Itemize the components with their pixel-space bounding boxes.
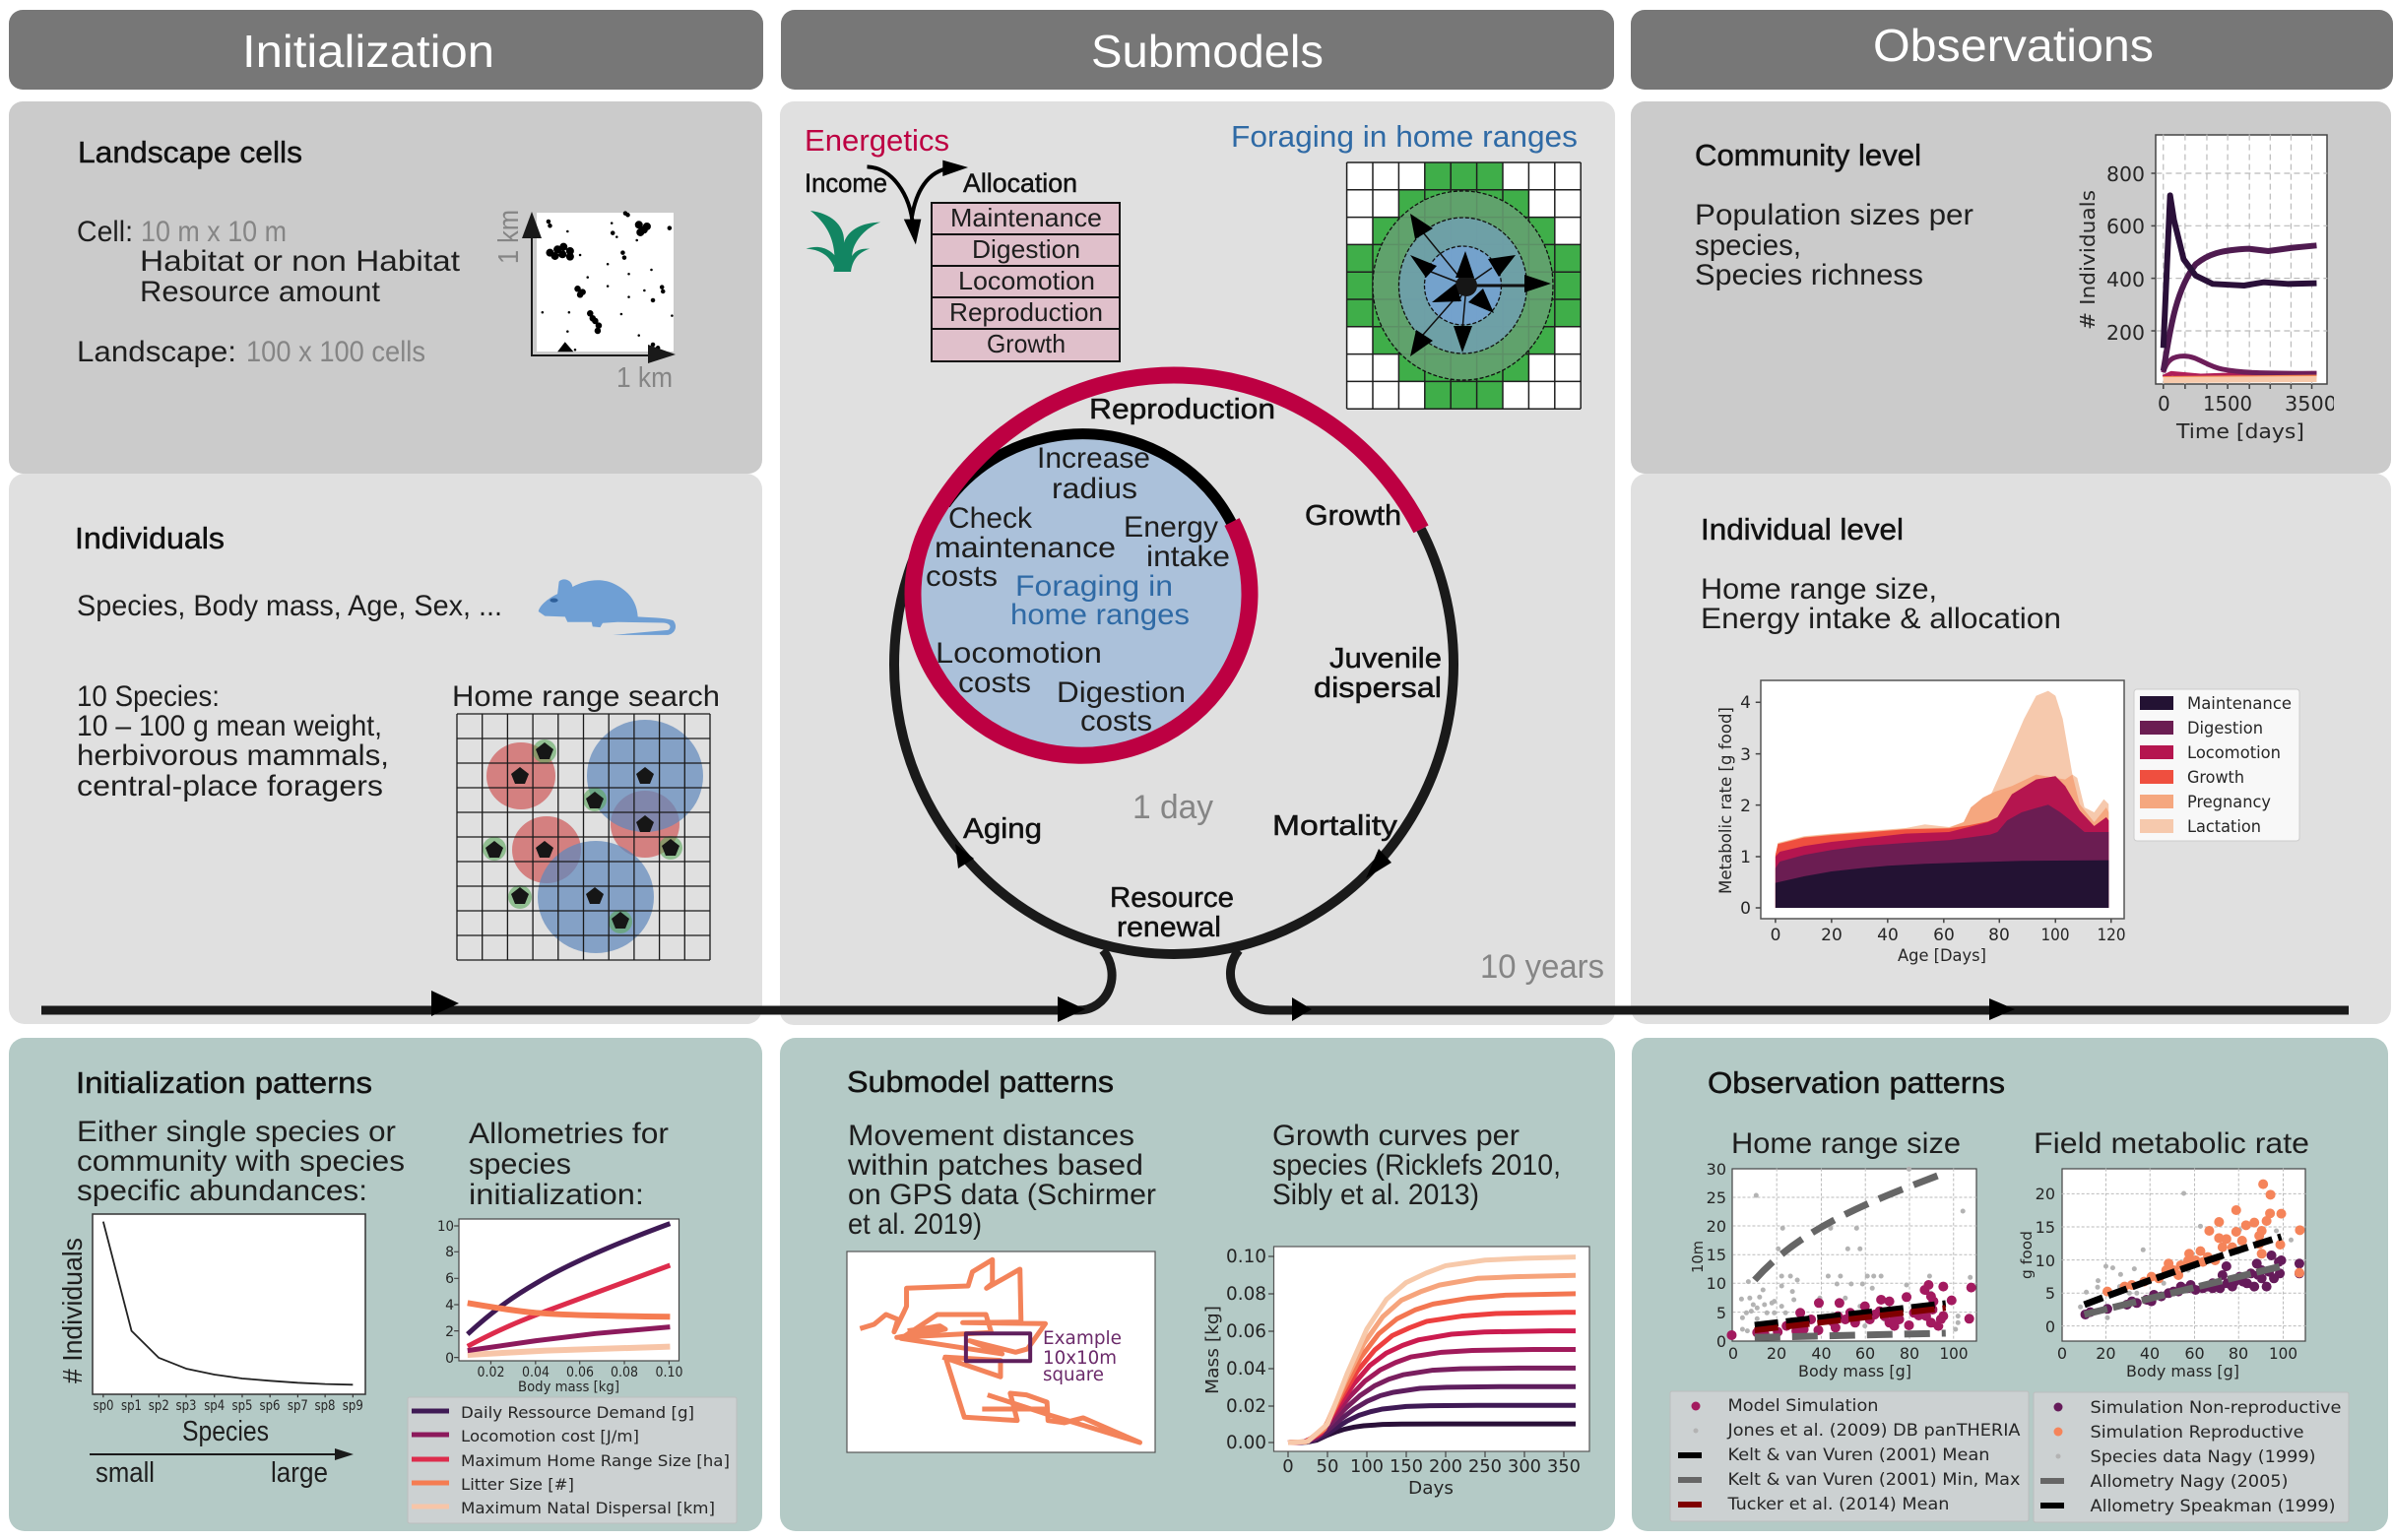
chart: allometries: 0 [445, 1351, 454, 1367]
chart: population over time: 400 [2106, 268, 2145, 291]
table: energy allocation: Growth [987, 329, 1066, 358]
chart: population over time: # Individuals [2076, 190, 2100, 330]
panel: observation patterns [1632, 1038, 2388, 1531]
text: community description [1695, 199, 1973, 291]
chart: field metabolic rate scatter: 0 [2045, 1317, 2055, 1336]
arrowhead: aging [955, 844, 974, 868]
text: cell description [77, 216, 461, 368]
heading: home range size: Home range size [1731, 1127, 1961, 1160]
chart: home range size scatter: 25 [1707, 1188, 1726, 1207]
chart: metabolic rate stacked area: Age [Days] [1898, 946, 1986, 966]
chart: field metabolic rate scatter: g food [2018, 1231, 2036, 1279]
chart: home range size scatter: 10 [1707, 1274, 1726, 1293]
diagram: foraging grid [1347, 162, 1581, 409]
legend: allometries [408, 1397, 737, 1523]
map: habitat landscape [537, 213, 674, 352]
heading: individuals: Individuals [75, 521, 225, 555]
text: allometries: Allometries for [469, 1118, 669, 1150]
chart: growth curves: 350 [1547, 1456, 1581, 1477]
chart: growth curves: Mass [kg] [1202, 1306, 1223, 1394]
legend: field metabolic rate: Species data Nagy (1999) [2090, 1447, 2316, 1467]
panel: individuals [9, 474, 762, 1024]
text: individual description: Energy intake & allocation [1701, 603, 2061, 635]
legend: allometries: Locomotion cost [J/m] [461, 1427, 639, 1445]
chart: metabolic rate stacked area: 1 [1740, 848, 1751, 867]
legend: allometries: Litter Size [#] [461, 1475, 574, 1494]
text: species description: 10 – 100 g mean weight, [77, 710, 382, 742]
text: abundances: Either single species or [77, 1116, 396, 1148]
label: 1 km horizontal: 1 km [616, 362, 673, 394]
panel: initialization patterns [9, 1038, 762, 1531]
text: community description: Population sizes per [1695, 199, 1973, 231]
legend: metabolic rate: Locomotion [2187, 743, 2281, 763]
chart: allometries [437, 1219, 683, 1395]
legend: field metabolic rate: Simulation Reproductive [2090, 1423, 2304, 1443]
chart: species abundance: sp8 [315, 1398, 335, 1414]
text: cell description: 100 x 100 cells [246, 336, 425, 368]
header: Observations [1631, 10, 2393, 90]
table: energy allocation: Maintenance [950, 203, 1102, 232]
chart: home range size scatter [1689, 1160, 1976, 1380]
label: income: Income [805, 168, 887, 198]
heading: community level: Community level [1695, 138, 1921, 172]
labels: daily foraging steps: Energy [1124, 511, 1218, 544]
chart: growth curves: 200 [1429, 1456, 1462, 1477]
label: species: Species [182, 1416, 269, 1447]
labels: daily foraging steps [926, 442, 1230, 738]
chart: species abundance: sp3 [175, 1398, 197, 1414]
chart: metabolic rate stacked area: Metabolic rate [g food] [1716, 707, 1736, 894]
text: cell description: Resource amount [140, 276, 381, 308]
icon: mouse [539, 579, 676, 635]
labels: daily foraging steps: maintenance [935, 532, 1116, 564]
labels: yearly steps: Mortality [1272, 810, 1398, 842]
labels: daily foraging steps: costs [1080, 705, 1152, 738]
labels: daily foraging steps: Foraging in [1015, 570, 1173, 603]
chart: metabolic rate stacked area [1716, 680, 2125, 966]
chart: allometries: Body mass [kg] [518, 1380, 619, 1395]
chart: metabolic rate stacked area: 0 [1740, 899, 1751, 919]
chart: growth curves: 150 [1390, 1456, 1423, 1477]
chart: growth curves: 250 [1468, 1456, 1502, 1477]
chart: metabolic rate stacked area: 3 [1740, 745, 1751, 765]
chart: species abundance: sp2 [149, 1398, 169, 1414]
heading: foraging in home ranges: Foraging in home ranges [1231, 119, 1578, 154]
text: movement distances [847, 1120, 1156, 1241]
chart: population over time: 3500 [2285, 392, 2337, 416]
text: allometries: initialization: [469, 1179, 644, 1211]
text: individual description: Home range size, [1701, 573, 1937, 606]
chart: species abundance: sp5 [232, 1398, 252, 1414]
chart: field metabolic rate scatter: 10 [2036, 1251, 2055, 1270]
legend: home range size: Kelt & van Vuren (2001) Min, Max [1727, 1470, 2021, 1490]
chart: GPS movement track [847, 1251, 1155, 1452]
legend: metabolic rate: Pregnancy [2187, 793, 2271, 812]
chart: metabolic rate stacked area: 4 [1740, 693, 1751, 713]
legend: metabolic rate: Lactation [2187, 817, 2261, 837]
labels: daily foraging steps: Check [948, 502, 1033, 535]
text: species description: 10 Species: [77, 680, 220, 713]
labels: daily foraging steps: home ranges [1010, 599, 1190, 631]
diagram: home range search grid [457, 714, 710, 960]
text: abundances [77, 1116, 405, 1207]
chart: metabolic rate stacked area: 80 [1988, 926, 2010, 945]
chart: field metabolic rate scatter: 60 [2184, 1344, 2205, 1363]
text: species description: herbivorous mammals, [77, 739, 389, 772]
table: energy allocation: Locomotion [958, 266, 1095, 295]
chart: metabolic rate stacked area: 60 [1933, 926, 1955, 945]
labels: yearly steps: dispersal [1314, 673, 1442, 704]
heading: landscape cells: Landscape cells [78, 135, 302, 169]
chart: home range size scatter: 40 [1811, 1344, 1832, 1363]
label: 1 day: 1 day [1132, 789, 1213, 826]
chart: population over time: 1500 [2203, 392, 2252, 416]
chart: home range size scatter: 80 [1900, 1344, 1919, 1363]
labels: daily foraging steps: costs [958, 667, 1031, 699]
label: allocation: Allocation [963, 168, 1077, 198]
chart: species abundance: sp6 [260, 1398, 281, 1414]
chart: field metabolic rate scatter: 20 [2036, 1185, 2055, 1203]
chart: field metabolic rate scatter: Body mass [g] [2126, 1362, 2239, 1380]
chart: population over time: 200 [2106, 321, 2145, 345]
header: Submodels: Submodels [1091, 26, 1324, 77]
header: Observations: Observations [1873, 20, 2154, 71]
label: large: large [271, 1457, 328, 1489]
arrowhead: mortality [1366, 849, 1391, 878]
chart: home range size scatter: 5 [1716, 1304, 1726, 1322]
arrow: main timeline right [1230, 950, 2349, 1021]
text: community description: species, [1695, 229, 1801, 262]
legend: home range size [1670, 1391, 2029, 1521]
legend: home range size: Jones et al. (2009) DB panTHERIA [1726, 1421, 2021, 1441]
chart: growth curves: Days [1408, 1478, 1454, 1499]
chart: metabolic rate stacked area: 100 [2040, 926, 2070, 945]
legend: home range size: Model Simulation [1727, 1396, 1879, 1416]
legend: metabolic rate: Growth [2187, 768, 2244, 788]
diagram: daily cycle inner disc [913, 434, 1250, 757]
labels: yearly steps [963, 394, 1442, 943]
chart: species abundance: sp7 [288, 1398, 308, 1414]
chart: metabolic rate stacked area: 120 [2098, 926, 2125, 945]
chart: metabolic rate stacked area: 2 [1740, 797, 1751, 816]
chart: species abundance: sp9 [343, 1398, 363, 1414]
heading: energetics: Energetics [805, 123, 949, 158]
chart: field metabolic rate scatter: 100 [2269, 1344, 2297, 1363]
text: community description: Species richness [1695, 259, 1923, 291]
chart: allometries: 0.10 [656, 1365, 683, 1380]
chart: home range size scatter: 30 [1707, 1160, 1726, 1179]
arrow: main timeline left [41, 950, 1112, 1022]
chart: species abundance: sp4 [204, 1398, 225, 1414]
labels: daily foraging steps: radius [1052, 473, 1137, 505]
labels: yearly steps: renewal [1117, 912, 1221, 943]
chart: growth curves: 0.08 [1226, 1283, 1266, 1305]
chart: home range size scatter: 100 [1940, 1344, 1968, 1363]
heading: home range search: Home range search [452, 680, 720, 713]
text: allometries: species [469, 1148, 571, 1181]
legend: field metabolic rate: Allometry Speakman (1999) [2090, 1497, 2336, 1516]
chart: growth curves: 0.06 [1226, 1320, 1266, 1342]
chart: allometries: 8 [445, 1245, 454, 1260]
arrows: income and allocation [868, 160, 968, 244]
text: allometries [469, 1118, 669, 1211]
chart: field metabolic rate scatter [2018, 1169, 2305, 1380]
legend: metabolic rate: Digestion [2187, 719, 2263, 738]
text: abundances: community with species [77, 1145, 405, 1178]
arrow: species size [90, 1448, 354, 1460]
chart: field metabolic rate scatter: 20 [2096, 1344, 2116, 1363]
panel: submodels [780, 101, 1615, 1025]
labels: daily foraging steps: intake [1146, 541, 1230, 573]
legend: allometries: Maximum Home Range Size [ha] [461, 1451, 730, 1470]
chart: home range size scatter: 60 [1855, 1344, 1875, 1363]
labels: yearly steps: Resource [1110, 882, 1234, 914]
chart: population over time: 0 [2158, 392, 2170, 416]
heading: field metabolic rate: Field metabolic rate [2034, 1127, 2309, 1160]
chart: field metabolic rate scatter: 0 [2057, 1344, 2067, 1363]
chart: home range size scatter: 0 [1716, 1332, 1726, 1351]
chart: growth curves: 50 [1317, 1456, 1338, 1477]
labels: daily foraging steps: costs [926, 560, 998, 593]
heading: initialization patterns: Initialization patterns [76, 1065, 372, 1100]
legend: allometries: Maximum Natal Dispersal [km] [461, 1499, 715, 1517]
chart: growth curves: 0.04 [1226, 1358, 1266, 1380]
chart: home range size scatter: Body mass [g] [1798, 1362, 1911, 1380]
chart: allometries: 2 [445, 1324, 454, 1340]
text: movement distances: on GPS data (Schirmer [848, 1179, 1156, 1211]
chart: growth curves: 0.10 [1226, 1246, 1266, 1267]
labels: yearly steps: Juvenile [1329, 643, 1442, 674]
chart: field metabolic rate scatter: 80 [2229, 1344, 2248, 1363]
chart: species abundance: # Individuals [57, 1238, 88, 1383]
chart: allometries: 0.04 [522, 1365, 550, 1380]
labels: yearly steps: Aging [963, 813, 1042, 845]
chart: field metabolic rate scatter: 5 [2045, 1284, 2055, 1303]
legend: metabolic rate [2134, 689, 2299, 841]
chart: GPS movement track: Example [1043, 1327, 1122, 1349]
labels: daily foraging steps: Digestion [1057, 676, 1186, 709]
chart: home range size scatter: 10m [1689, 1241, 1707, 1273]
chart: home range size scatter: 15 [1707, 1246, 1726, 1264]
text: species description: central-place foragers [77, 770, 383, 802]
diagram: yearly loop [894, 375, 1454, 954]
panel: landscape cells [9, 101, 762, 474]
table: energy allocation: Reproduction [949, 297, 1103, 327]
chart: population over time: 800 [2106, 162, 2145, 186]
legend: field metabolic rate [2034, 1392, 2349, 1522]
legend: allometries: Daily Ressource Demand [g] [461, 1403, 694, 1422]
chart: field metabolic rate scatter: 40 [2140, 1344, 2160, 1363]
label: 1 km vertical: 1 km [493, 210, 525, 264]
heading: observation patterns: Observation patterns [1708, 1065, 2005, 1100]
table: energy allocation: Digestion [972, 234, 1080, 264]
labels: daily foraging steps: Locomotion [936, 637, 1102, 670]
chart: growth curves: 0.00 [1226, 1432, 1266, 1453]
axes: map scale arrows [522, 212, 676, 363]
legend: home range size: Kelt & van Vuren (2001) Mean [1727, 1445, 1989, 1465]
panel: individual level [1631, 474, 2391, 1024]
header: Submodels [781, 10, 1614, 90]
labels: daily foraging steps: Increase [1037, 442, 1150, 475]
chart: species abundance: sp0 [93, 1398, 114, 1414]
arrows: foraging movement [1410, 214, 1551, 356]
chart: GPS movement track: 10x10m [1043, 1347, 1117, 1369]
text: cell description: Cell: [77, 216, 133, 248]
chart: metabolic rate stacked area: 20 [1821, 926, 1843, 945]
chart: metabolic rate stacked area: 0 [1771, 926, 1780, 945]
chart: home range size scatter: 20 [1707, 1217, 1726, 1236]
chart: metabolic rate stacked area: 40 [1877, 926, 1899, 945]
chart: species abundance [57, 1214, 365, 1414]
chart: GPS movement track: square [1043, 1364, 1104, 1385]
label: 10 years: 10 years [1480, 948, 1604, 986]
header: Initialization [9, 10, 763, 90]
chart: growth curves: 100 [1350, 1456, 1384, 1477]
chart: growth curves: 300 [1508, 1456, 1541, 1477]
text: cell description: 10 m x 10 m [141, 216, 287, 248]
label: small: small [96, 1457, 155, 1489]
text: attributes: Species, Body mass, Age, Sex, ... [77, 590, 502, 622]
chart: allometries: 0.06 [566, 1365, 594, 1380]
labels: yearly steps: Reproduction [1089, 394, 1275, 425]
panel: community level [1631, 101, 2391, 474]
labels: yearly steps: Growth [1305, 500, 1401, 532]
chart: allometries: 10 [437, 1219, 454, 1235]
text: growth curves: species (Ricklefs 2010, [1272, 1149, 1561, 1182]
chart: allometries: 0.08 [611, 1365, 638, 1380]
text: cell description: Landscape: [77, 336, 236, 368]
text: movement distances: Movement distances [848, 1120, 1134, 1152]
chart: growth curves: 0 [1282, 1456, 1294, 1477]
chart: population over time [2076, 135, 2337, 443]
text: abundances: specific abundances: [77, 1175, 367, 1207]
chart: allometries: 4 [445, 1298, 454, 1314]
chart: home range size scatter: 0 [1728, 1344, 1738, 1363]
legend: field metabolic rate: Simulation Non-reproductive [2090, 1398, 2342, 1418]
chart: population over time: Time [days] [2175, 419, 2304, 443]
legend: metabolic rate: Maintenance [2187, 694, 2292, 714]
chart: species abundance: sp1 [121, 1398, 142, 1414]
chart: allometries: 6 [445, 1271, 454, 1287]
chart: population over time: 600 [2106, 215, 2145, 238]
panel: submodel patterns [780, 1038, 1615, 1531]
icon: plant [807, 211, 880, 272]
text: species description [77, 680, 389, 802]
legend: field metabolic rate: Allometry Nagy (2005) [2090, 1472, 2289, 1492]
text: growth curves [1272, 1120, 1561, 1211]
chart: allometries: 0.02 [477, 1365, 504, 1380]
chart: field metabolic rate scatter: 15 [2036, 1218, 2055, 1237]
chart: growth curves: 0.02 [1226, 1395, 1266, 1417]
legend: home range size: Tucker et al. (2014) Mean [1726, 1495, 1950, 1514]
text: movement distances: et al. 2019) [848, 1208, 982, 1241]
text: growth curves: Growth curves per [1272, 1120, 1520, 1152]
chart: growth curves [1205, 1246, 1590, 1497]
text: individual description [1701, 573, 2061, 635]
heading: submodel patterns: Submodel patterns [847, 1064, 1114, 1099]
chart: home range size scatter: 20 [1767, 1344, 1786, 1363]
header: Initialization: Initialization [242, 26, 494, 77]
heading: individual level: Individual level [1701, 512, 1904, 546]
text: cell description: Habitat or non Habitat [140, 245, 461, 278]
text: movement distances: within patches based [847, 1149, 1143, 1182]
text: growth curves: Sibly et al. 2013) [1272, 1179, 1479, 1211]
table: energy allocation [932, 203, 1120, 361]
